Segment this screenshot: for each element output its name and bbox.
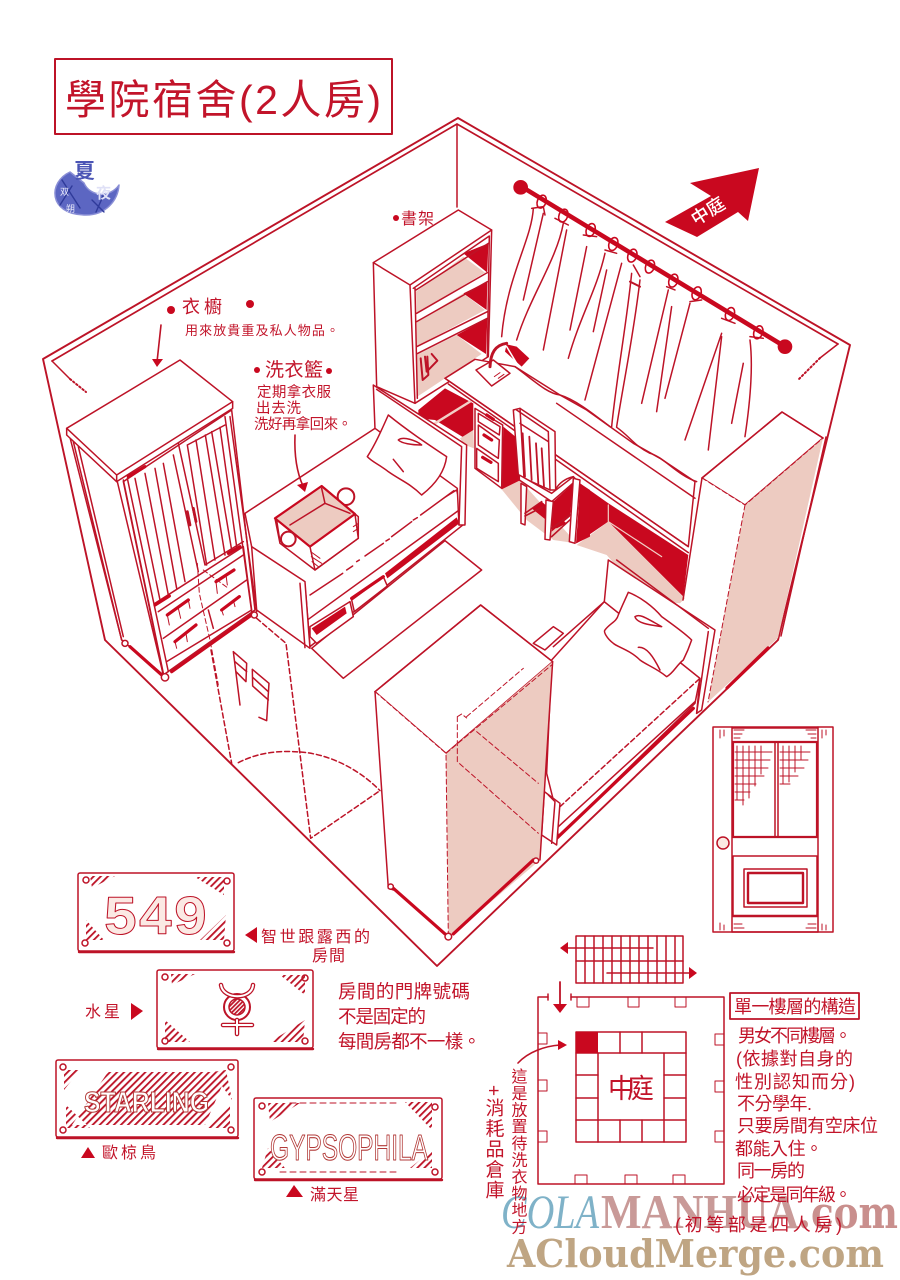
- label: laundry basket: 洗衣籃: [265, 359, 323, 381]
- door plate: Starling: STARLING: [84, 1087, 209, 1119]
- note: floor rules: 必定是同年級。: [737, 1185, 852, 1205]
- tall cabinet by the window: [678, 412, 826, 702]
- arrow: to laundry basket: [295, 435, 308, 492]
- wardrobe feet: [161, 674, 169, 681]
- wardrobe drawers: [155, 547, 252, 662]
- logo: blue crescent moon: 夏: [74, 160, 95, 183]
- note: door plate numbers: 每間房都不一樣。: [338, 1031, 481, 1052]
- shelf boards: [416, 257, 485, 397]
- space under the shelf: [418, 388, 473, 438]
- logo: blue crescent moon: 双: [60, 187, 69, 197]
- curtain hem: [515, 367, 697, 482]
- curtain and rod: [502, 180, 792, 450]
- vertical note: consumables storage: +消耗品倉庫: [482, 1085, 504, 1200]
- wardrobe doors: [123, 417, 257, 673]
- pillow: [367, 415, 447, 495]
- note: floor rules: 都能入住。: [735, 1139, 823, 1159]
- box heading: single floor structure: 單一樓層的構造: [734, 997, 856, 1017]
- label: wardrobe: 用來放貴重及私人物品。: [185, 323, 339, 338]
- bed by the bookshelf: [245, 385, 467, 648]
- grid direction arrows: [564, 948, 692, 973]
- note: floor rules: 同一房的: [737, 1161, 805, 1181]
- note: floor rules: 男女不同樓層。: [738, 1026, 852, 1046]
- caption: 549 plate: [245, 927, 370, 965]
- label: laundry basket: 定期拿衣服: [257, 383, 332, 401]
- curtain rod: [522, 187, 785, 347]
- label: laundry basket: 洗好再拿回來。: [254, 415, 352, 433]
- caption: Starling: 歐椋鳥: [102, 1144, 156, 1162]
- laundry basket: [275, 486, 358, 570]
- note: floor rules: 性別認知而分): [735, 1072, 855, 1092]
- headboard: [604, 560, 715, 713]
- desk lamp: [476, 360, 510, 386]
- wardrobe in the foreground: [375, 605, 553, 940]
- note: floor rules: (依據對自身的: [736, 1049, 853, 1069]
- glass shading: [735, 746, 810, 805]
- desk top and lamp: [445, 343, 697, 603]
- note: floor rules: 不分學年.: [737, 1094, 812, 1114]
- note: door plate numbers: 不是固定的: [338, 1006, 426, 1027]
- wardrobe top: [67, 360, 233, 482]
- door knob: [717, 837, 729, 849]
- laundry room highlighted: [576, 1032, 598, 1053]
- logo: blue crescent moon: [55, 160, 119, 215]
- first under-bed drawer: [310, 602, 353, 643]
- room walls outline: [43, 118, 850, 966]
- entrance arrow: [559, 982, 561, 1006]
- footboard: [252, 547, 310, 648]
- bed base strip: [385, 517, 459, 578]
- door character marking: [233, 652, 269, 721]
- watermark: ACloudMerge.com: [506, 1231, 884, 1276]
- arrow to laundry room: [518, 1045, 560, 1063]
- desk drawers and chair: [418, 388, 590, 543]
- door plate: Mercury: [157, 970, 313, 1049]
- chair seat: [519, 475, 577, 502]
- label: laundry basket: [254, 359, 352, 433]
- watermark: COLA: [501, 1186, 600, 1239]
- pillow: [605, 592, 692, 677]
- door plate: Starling: [56, 1060, 238, 1138]
- watermark: MANHUA: [601, 1184, 800, 1239]
- shelf back panels: [457, 243, 488, 354]
- door plate: 549: [78, 873, 234, 952]
- door plate: Gypsophila: [254, 1098, 442, 1180]
- note: floor rules: [675, 1026, 878, 1235]
- bookshelf: [373, 210, 492, 403]
- arrow: courtyard direction: [665, 168, 759, 237]
- title box: [55, 59, 392, 134]
- book-ends: [421, 354, 437, 380]
- caption: Mercury: [85, 1003, 143, 1021]
- mattress edge: [310, 491, 454, 595]
- headboard: [373, 385, 467, 525]
- door plate: Gypsophila: GYPSOPHILA: [270, 1127, 428, 1168]
- door swing outline on the floor: [211, 618, 380, 838]
- caption: Mercury: 水星: [85, 1003, 120, 1021]
- floor plan: [518, 982, 724, 1184]
- chair legs: [521, 483, 553, 540]
- wardrobe: [67, 360, 257, 685]
- caption: Starling: [81, 1144, 156, 1162]
- foot panel: [542, 792, 560, 845]
- rod rings: [535, 194, 765, 340]
- rug: [312, 541, 482, 678]
- second under-bed drawer: [352, 577, 387, 612]
- label: wardrobe: [167, 297, 339, 338]
- label: wardrobe: 衣櫥: [182, 297, 222, 317]
- arrow: to wardrobe: [152, 325, 163, 367]
- logo: blue crescent moon: 朔: [66, 203, 75, 214]
- caption: Gypsophila: [286, 1185, 359, 1204]
- label: laundry basket: 出去洗: [256, 400, 302, 417]
- label: bookshelf: 書架: [401, 210, 434, 228]
- caption: 549 plate: 智世跟露西的: [261, 928, 370, 946]
- top building wing grid: [560, 936, 697, 983]
- dark under chair: [532, 483, 573, 532]
- note: floor rules: 只要房間有空床位: [737, 1116, 878, 1136]
- floor plan: 中庭: [608, 1074, 654, 1104]
- drawer unit: [475, 408, 503, 488]
- caption: 549 plate: 房間: [312, 947, 345, 965]
- inner room ring: [576, 1032, 686, 1142]
- logo: blue crescent moon: 夜: [96, 184, 111, 202]
- caption: Gypsophila: 滿天星: [310, 1186, 359, 1204]
- arrow: courtyard direction: 中庭: [688, 193, 729, 229]
- desk side panel: [569, 478, 580, 543]
- chair back: [513, 408, 556, 490]
- note: floor rules: (初等部是四人房): [675, 1215, 842, 1235]
- curtain folds: [502, 208, 751, 450]
- bed by the courtyard wall: [533, 560, 715, 845]
- floor shade and dark under-desk, right side: [577, 483, 688, 597]
- vertical note: laundry storage: 這是放置待洗衣物地方: [508, 1067, 528, 1235]
- watermark: [501, 1184, 898, 1276]
- note: door plate numbers: [338, 981, 481, 1052]
- dark knee space: [502, 427, 521, 489]
- door elevation: [713, 727, 833, 932]
- note: door plate numbers: 房間的門牌號碼: [338, 981, 470, 1002]
- title box: 學院宿舍(2人房): [65, 77, 381, 123]
- door plate: 549: 549: [103, 887, 208, 951]
